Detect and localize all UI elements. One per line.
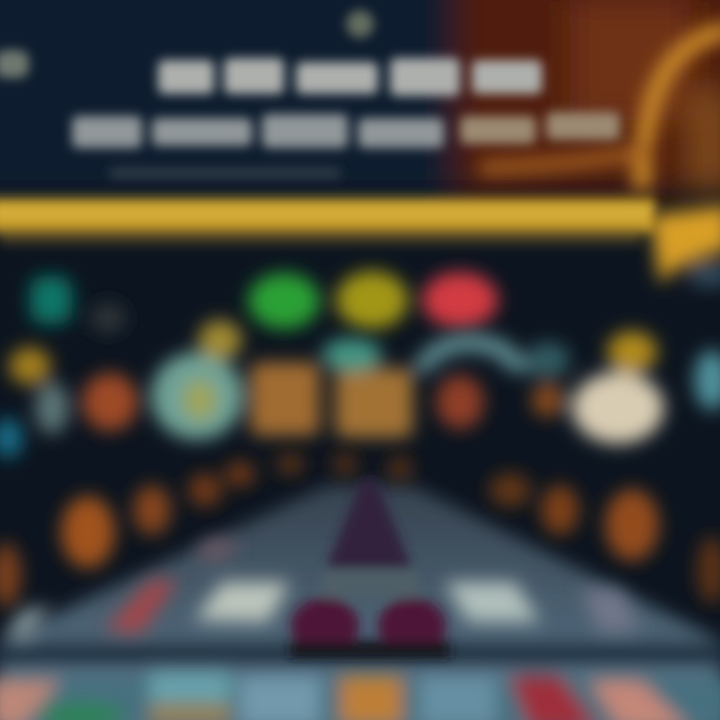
title line one: [158, 58, 542, 96]
gold banner corner: [650, 205, 720, 286]
object: blue left: [0, 418, 23, 458]
lower row of objects: [0, 320, 720, 458]
gold banner: [0, 198, 655, 244]
object: red ball: [436, 375, 484, 429]
icon: red pill: [422, 272, 498, 328]
object: orange small: [531, 383, 565, 417]
header backdrop: [0, 0, 720, 195]
object: orange block one: [250, 362, 320, 436]
central figure: [290, 480, 450, 658]
subtitle: [110, 168, 340, 178]
object: yellow small ball: [9, 347, 51, 385]
object: yellow small right: [607, 331, 657, 373]
title: [0, 10, 620, 178]
object: teal right: [694, 350, 720, 410]
object: pale small: [35, 382, 69, 434]
top emblem: [346, 10, 374, 38]
icon: teal badge: [30, 276, 72, 324]
chairs left: [0, 453, 304, 607]
icon: olive pill: [336, 271, 408, 329]
title line two: [72, 114, 444, 148]
decorative arch: [480, 30, 720, 190]
chairs right: [332, 454, 720, 604]
object: mint globe: [151, 352, 243, 440]
bottom strip tiles: [0, 672, 720, 720]
object: teal arch: [412, 333, 530, 372]
object: teal small: [526, 342, 570, 378]
corner badge: [0, 50, 29, 78]
floor tiles: [5, 540, 640, 640]
object: orange block two: [335, 368, 413, 438]
object: cream ball: [572, 372, 664, 444]
object: orange ball: [82, 373, 138, 431]
upper row of icons: [30, 271, 498, 333]
icon: grey badge: [90, 303, 126, 333]
icon: green pill: [248, 273, 320, 329]
floor: [0, 484, 720, 720]
